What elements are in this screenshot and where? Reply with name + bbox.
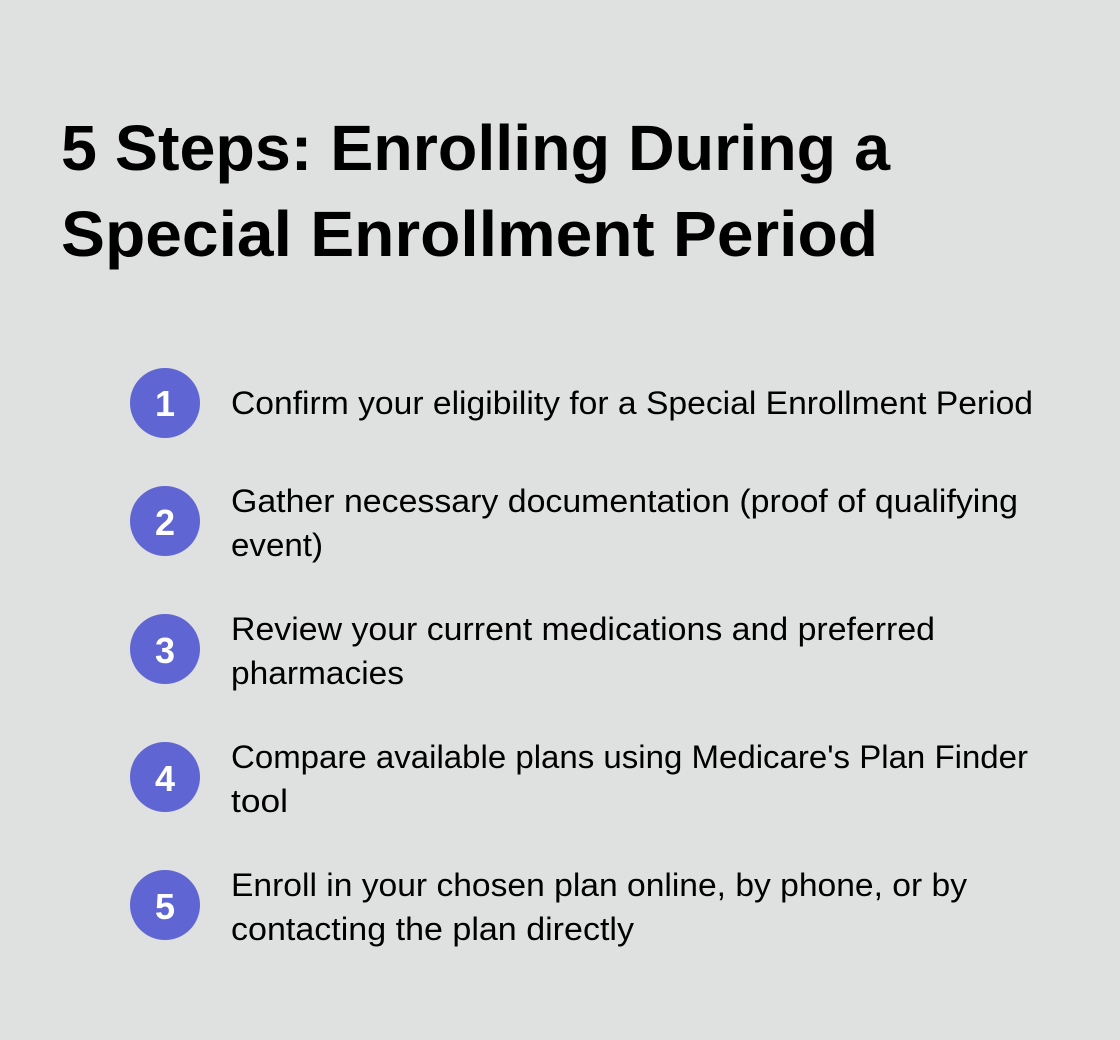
step 1 text: Confirm your eligibility for a Special Enrollment Period <box>231 385 1033 421</box>
step 3 <box>130 611 935 691</box>
number badge 3 <box>130 614 200 684</box>
number badge 2 <box>130 486 200 556</box>
step 3 text: pharmacies <box>231 655 404 691</box>
step 2 text: Gather necessary documentation (proof of qualifying <box>231 483 1018 519</box>
step 4 text: tool <box>231 783 288 819</box>
number badge 4: 4 <box>155 758 175 799</box>
step 3 text: Review your current medications and preferred <box>231 611 935 647</box>
step 5 text: Enroll in your chosen plan online, by phone, or by <box>231 867 967 903</box>
step 2 text <box>231 483 1018 563</box>
step 4 <box>130 739 1028 819</box>
step 1 <box>130 368 1033 438</box>
title: Special Enrollment Period <box>61 198 878 270</box>
number badge 3: 3 <box>155 630 175 671</box>
number badge 1 <box>130 368 200 438</box>
step 4 text <box>231 739 1028 819</box>
title: 5 Steps: Enrolling During a <box>61 112 890 184</box>
number badge 5 <box>130 870 200 940</box>
number badge 2: 2 <box>155 502 175 543</box>
step 4 text: Compare available plans using Medicare's Plan Finder <box>231 739 1028 775</box>
step 5 text: contacting the plan directly <box>231 911 634 947</box>
number badge 4 <box>130 742 200 812</box>
step 2 <box>130 483 1018 563</box>
step 5 text <box>231 867 967 947</box>
step 2 text: event) <box>231 527 323 563</box>
title <box>61 112 890 270</box>
step 3 text <box>231 611 935 691</box>
step 5 <box>130 867 967 947</box>
number badge 1: 1 <box>155 383 175 424</box>
number badge 5: 5 <box>155 886 175 927</box>
